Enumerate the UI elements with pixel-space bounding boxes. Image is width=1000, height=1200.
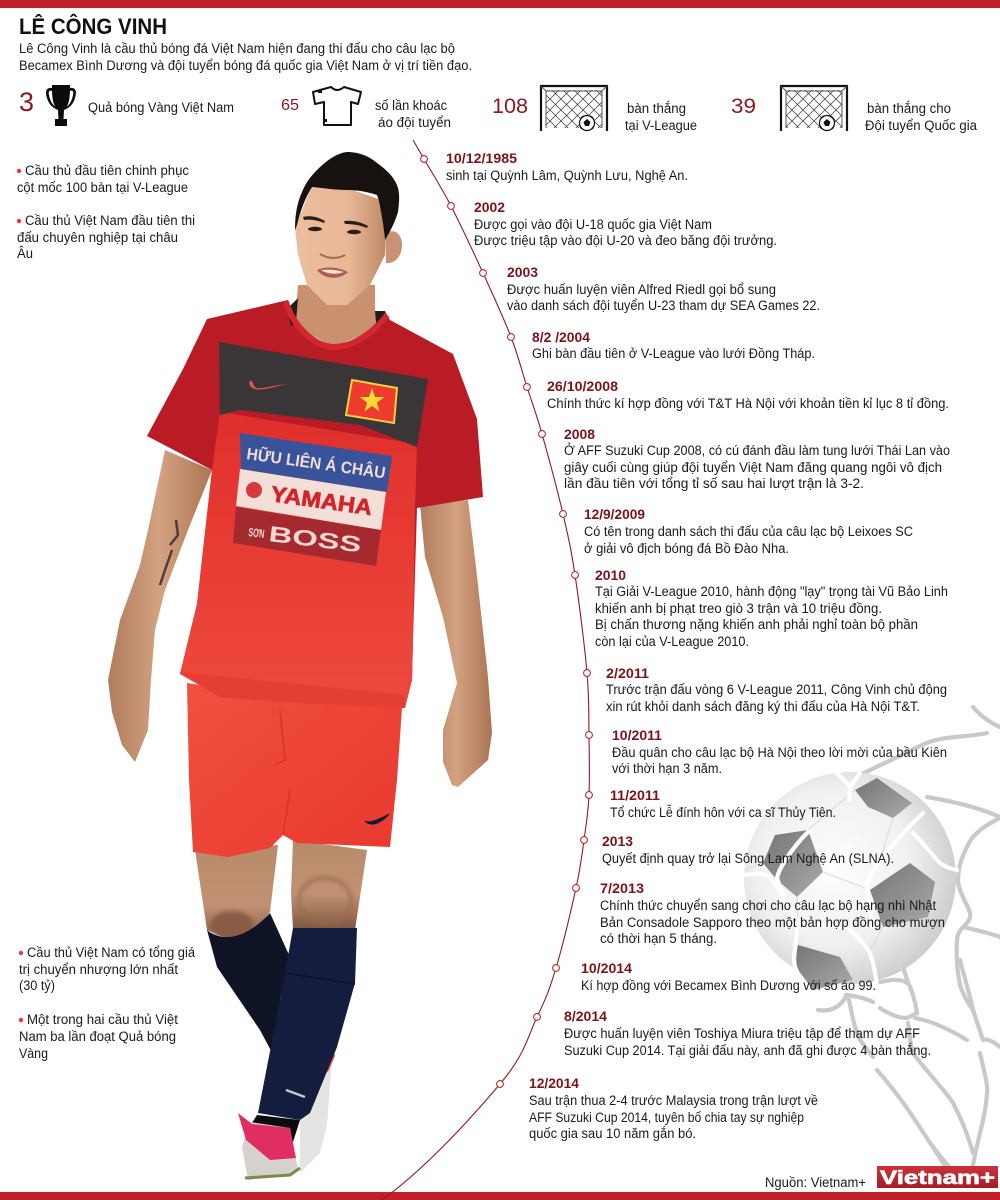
- stat: national team goals: Đội tuyển Quốc gia: [865, 118, 977, 133]
- achievements, lower left: Nam ba lần đoạt Quả bóng: [19, 1029, 176, 1044]
- entry 2013: 2013: [602, 834, 633, 849]
- back sock: [207, 913, 289, 1062]
- entry 2008: Ở AFF Suzuki Cup 2008, có cú đánh đầu làm tung lưới Thái Lan vào: [564, 443, 950, 458]
- entry 10/2011: [612, 728, 947, 776]
- stat: V-League goals: 108: [492, 94, 528, 118]
- collar dark inside: [288, 298, 298, 326]
- entry 8/2014: [564, 1009, 931, 1058]
- entry 8/2014: Được huấn luyện viên Toshiya Miura triệu tập để tham dự AFF: [564, 1026, 920, 1041]
- flag: [346, 380, 397, 423]
- title: LÊ CÔNG VINH: [19, 14, 167, 39]
- achievements, lower left: Cầu thủ Việt Nam có tổng giá: [27, 945, 195, 960]
- stat: V-League goals: tại V-League: [625, 118, 697, 133]
- entry 10/2014: Kí hợp đồng với Becamex Bình Dương với số áo 99.: [581, 978, 876, 993]
- entry 2/2011: [606, 666, 947, 714]
- intro text: Becamex Bình Dương và đội tuyển bóng đá quốc gia Việt Nam ở vị trí tiền đạo.: [19, 58, 472, 73]
- stat: caps: áo đội tuyển: [378, 115, 451, 130]
- achievements, lower left: Vàng: [19, 1046, 48, 1061]
- stat: caps: số lần khoác: [375, 98, 447, 113]
- entry 11/2011: Tổ chức Lễ đính hôn với ca sĩ Thủy Tiên.: [610, 805, 836, 820]
- dark chest panel: [219, 342, 428, 447]
- entry 2010: Bị chấn thương nặng khiến anh phải nghỉ toàn bộ phần: [595, 617, 918, 632]
- sponsor: dark red band: [233, 507, 381, 566]
- entry 12/2014: quốc gia sau 10 năm gắn bó.: [529, 1126, 696, 1141]
- stat: golden balls: [19, 85, 234, 126]
- entry 2008: giây cuối cùng giúp đội tuyển Việt Nam đăng quang ngôi vô địch: [564, 460, 942, 475]
- entry 8/2/2004: 8/2 /2004: [532, 330, 590, 345]
- achievements, lower left: trị chuyển nhượng lớn nhất: [19, 962, 178, 977]
- achievements, upper left: đấu chuyên nghiệp tại châu: [17, 230, 178, 245]
- source credit: Nguồn: Vietnam+: [765, 1175, 866, 1190]
- stat: national team goals: [731, 86, 977, 133]
- timeline: [382, 140, 950, 1200]
- entry 7/2013: có thời hạn 5 tháng.: [600, 931, 717, 946]
- entry 10/12/1985: [446, 151, 688, 183]
- sponsor: white band: [236, 469, 386, 530]
- entry 10/2011: Đầu quân cho câu lạc bộ Hà Nội theo lời mời của bầu Kiên: [612, 745, 947, 760]
- entry 12/2014: 12/2014: [529, 1076, 579, 1091]
- entry 12/9/2009: [584, 507, 913, 556]
- achievements, upper left: Cầu thủ Việt Nam đầu tiên thi: [25, 213, 195, 228]
- sponsor: blue band: [240, 433, 392, 492]
- entry 12/2014: [529, 1076, 818, 1141]
- entry 2010: Tại Giải V-League 2010, hành động "lạy" trọng tài Vũ Bảo Linh: [595, 584, 948, 599]
- eyebrows and eyes: [303, 216, 368, 234]
- achievements, lower left: (30 tỷ): [19, 978, 55, 993]
- achievements, lower left: [19, 945, 195, 1061]
- stat: golden balls: Quả bóng Vàng Việt Nam: [88, 100, 234, 115]
- entry 2/2011: xin rút khỏi danh sách đăng ký thi đấu của Hà Nội T&T.: [606, 699, 920, 714]
- icon: shirt: [313, 87, 361, 125]
- left leg: [195, 845, 278, 945]
- entry 8/2/2004: [532, 330, 815, 361]
- entry 2010: 2010: [595, 568, 626, 583]
- sponsor: dark red band: SƠN: [248, 525, 265, 541]
- entry 7/2013: 7/2013: [600, 881, 645, 896]
- stat: national team goals: bàn thắng cho: [867, 101, 951, 116]
- entry 2008: 2008: [564, 427, 595, 442]
- entry 10/12/1985: sinh tại Quỳnh Lâm, Quỳnh Lưu, Nghệ An.: [446, 168, 688, 183]
- entry 12/9/2009: 12/9/2009: [584, 507, 645, 522]
- neck: [295, 285, 375, 347]
- entry 10/2014: 10/2014: [581, 961, 632, 976]
- swoosh: [249, 380, 287, 390]
- entry 8/2/2004: Ghi bàn đầu tiên ở V-League vào lưới Đồng Tháp.: [532, 346, 815, 361]
- front sock: [258, 928, 357, 1120]
- entry 7/2013: Bản Consadole Sapporo theo một bản hợp đồng cho mượn: [600, 915, 945, 930]
- head: [295, 152, 402, 305]
- entry 10/2011: 10/2011: [612, 728, 663, 743]
- rear boot: [300, 1047, 335, 1173]
- entry 2/2011: Trước trận đấu vòng 6 V-League 2011, Công Vinh chủ động: [606, 682, 947, 697]
- right arm: [420, 500, 492, 787]
- icon: trophy: [46, 85, 76, 126]
- nose and mouth: [320, 254, 345, 258]
- entry 2008: lần đầu tiên với tổng tỉ số sau hai lượt trận là 3-2.: [564, 476, 864, 491]
- stat: caps: [281, 87, 451, 130]
- football: [742, 770, 957, 1000]
- tattoo: [160, 520, 178, 585]
- stat: V-League goals: bàn thắng: [627, 101, 686, 116]
- entry 11/2011: 11/2011: [610, 788, 661, 803]
- entry 8/2014: 8/2014: [564, 1009, 608, 1024]
- achievements, upper left: Âu: [17, 246, 33, 261]
- entry 12/9/2009: Có tên trong danh sách thi đấu của câu lạc bộ Leixoes SC: [584, 524, 913, 539]
- entry 2013: [602, 834, 894, 866]
- logo: Vietnam+: Vietnam+: [880, 1168, 995, 1189]
- collar rib: [286, 302, 387, 347]
- stat: golden balls: 3: [19, 87, 34, 117]
- entry 2002: [474, 200, 777, 248]
- timeline markers: [421, 156, 592, 1087]
- entry 26/10/2008: [547, 379, 949, 411]
- entry 2003: 2003: [507, 265, 538, 280]
- entry 7/2013: [600, 881, 945, 946]
- right leg: [291, 840, 367, 930]
- entry 2003: [507, 265, 820, 313]
- shirt: [147, 298, 483, 708]
- sponsor: white band: YAMAHA: [269, 481, 374, 520]
- entry 2013: Quyết định quay trở lại Sông Lam Nghệ An (SLNA).: [602, 851, 894, 866]
- intro text: [19, 41, 472, 73]
- left arm: [108, 450, 212, 762]
- entry 12/9/2009: ở giải vô địch bóng đá Bồ Đào Nha.: [584, 541, 789, 556]
- hair: [295, 152, 399, 240]
- entry 2010: còn lại của V-League 2010.: [595, 634, 749, 649]
- entry 2010: [595, 568, 948, 649]
- stat: national team goals: 39: [731, 94, 756, 118]
- logo: Vietnam+: [877, 1166, 998, 1189]
- shirt lower body: [180, 412, 417, 708]
- entry 12/2014: Sau trận thua 2-4 trước Malaysia trong trận lượt về: [529, 1093, 818, 1108]
- bottom red band: [0, 1192, 1000, 1200]
- sponsor: dark red band: BOSS: [267, 521, 363, 557]
- entry 2003: Được huấn luyện viên Alfred Riedl gọi bổ sung: [507, 282, 776, 297]
- player illustration: [108, 152, 492, 1180]
- decorative goal net and football: [742, 707, 1000, 1167]
- intro text: Lê Công Vinh là cầu thủ bóng đá Việt Nam hiện đang thi đấu cho câu lạc bộ: [19, 41, 455, 56]
- top red band: [0, 0, 1000, 8]
- entry 11/2011: [610, 788, 836, 820]
- entry 2003: vào danh sách đội tuyển U-23 tham dự SEA Games 22.: [507, 298, 820, 313]
- entry 2002: Được triệu tập vào đội U-20 và đeo băng đội trưởng.: [474, 233, 777, 248]
- timeline curve: [382, 140, 589, 1200]
- shorts: [187, 683, 402, 857]
- entry 2008: [564, 427, 950, 491]
- entry 10/2014: [581, 961, 876, 993]
- stat: V-League goals: [492, 86, 697, 133]
- net behind ball: [818, 707, 1000, 1167]
- entry 26/10/2008: Chính thức kí hợp đồng với T&T Hà Nội với khoản tiền kỉ lục 8 tỉ đồng.: [547, 396, 949, 411]
- ankle: [250, 1115, 300, 1142]
- achievements, lower left: Một trong hai cầu thủ Việt: [27, 1012, 178, 1027]
- sponsor: blue band: HỮU LIÊN Á CHÂU: [245, 443, 387, 482]
- entry 12/2014: AFF Suzuki Cup 2014, tuyên bố chia tay sự nghiệp: [529, 1110, 804, 1125]
- entry 26/10/2008: 26/10/2008: [547, 379, 619, 394]
- achievements, upper left: Cầu thủ đầu tiên chinh phục: [25, 163, 189, 178]
- entry 2002: 2002: [474, 200, 505, 215]
- stat: caps: 65: [281, 97, 299, 114]
- icon: goal with ball: [781, 86, 847, 131]
- entry 10/2011: với thời hạn 3 năm.: [612, 761, 722, 776]
- icon: goal with ball: [541, 86, 607, 131]
- front boot: [238, 1113, 300, 1180]
- achievements, upper left: [17, 163, 195, 261]
- entry 10/12/1985: 10/12/1985: [446, 151, 518, 166]
- entry 2002: Được gọi vào đội U-18 quốc gia Việt Nam: [474, 217, 712, 232]
- achievements, upper left: cột mốc 100 bàn tại V-League: [17, 180, 188, 195]
- entry 2/2011: 2/2011: [606, 666, 650, 681]
- entry 7/2013: Chính thức chuyển sang chơi cho câu lạc bộ hạng nhì Nhật: [600, 898, 936, 913]
- entry 8/2014: Suzuki Cup 2014. Tại giải đấu này, anh đã ghi được 4 bàn thắng.: [564, 1043, 931, 1058]
- entry 2010: khiến anh bị phạt treo giò 3 trận và 10 triệu đồng.: [595, 601, 882, 616]
